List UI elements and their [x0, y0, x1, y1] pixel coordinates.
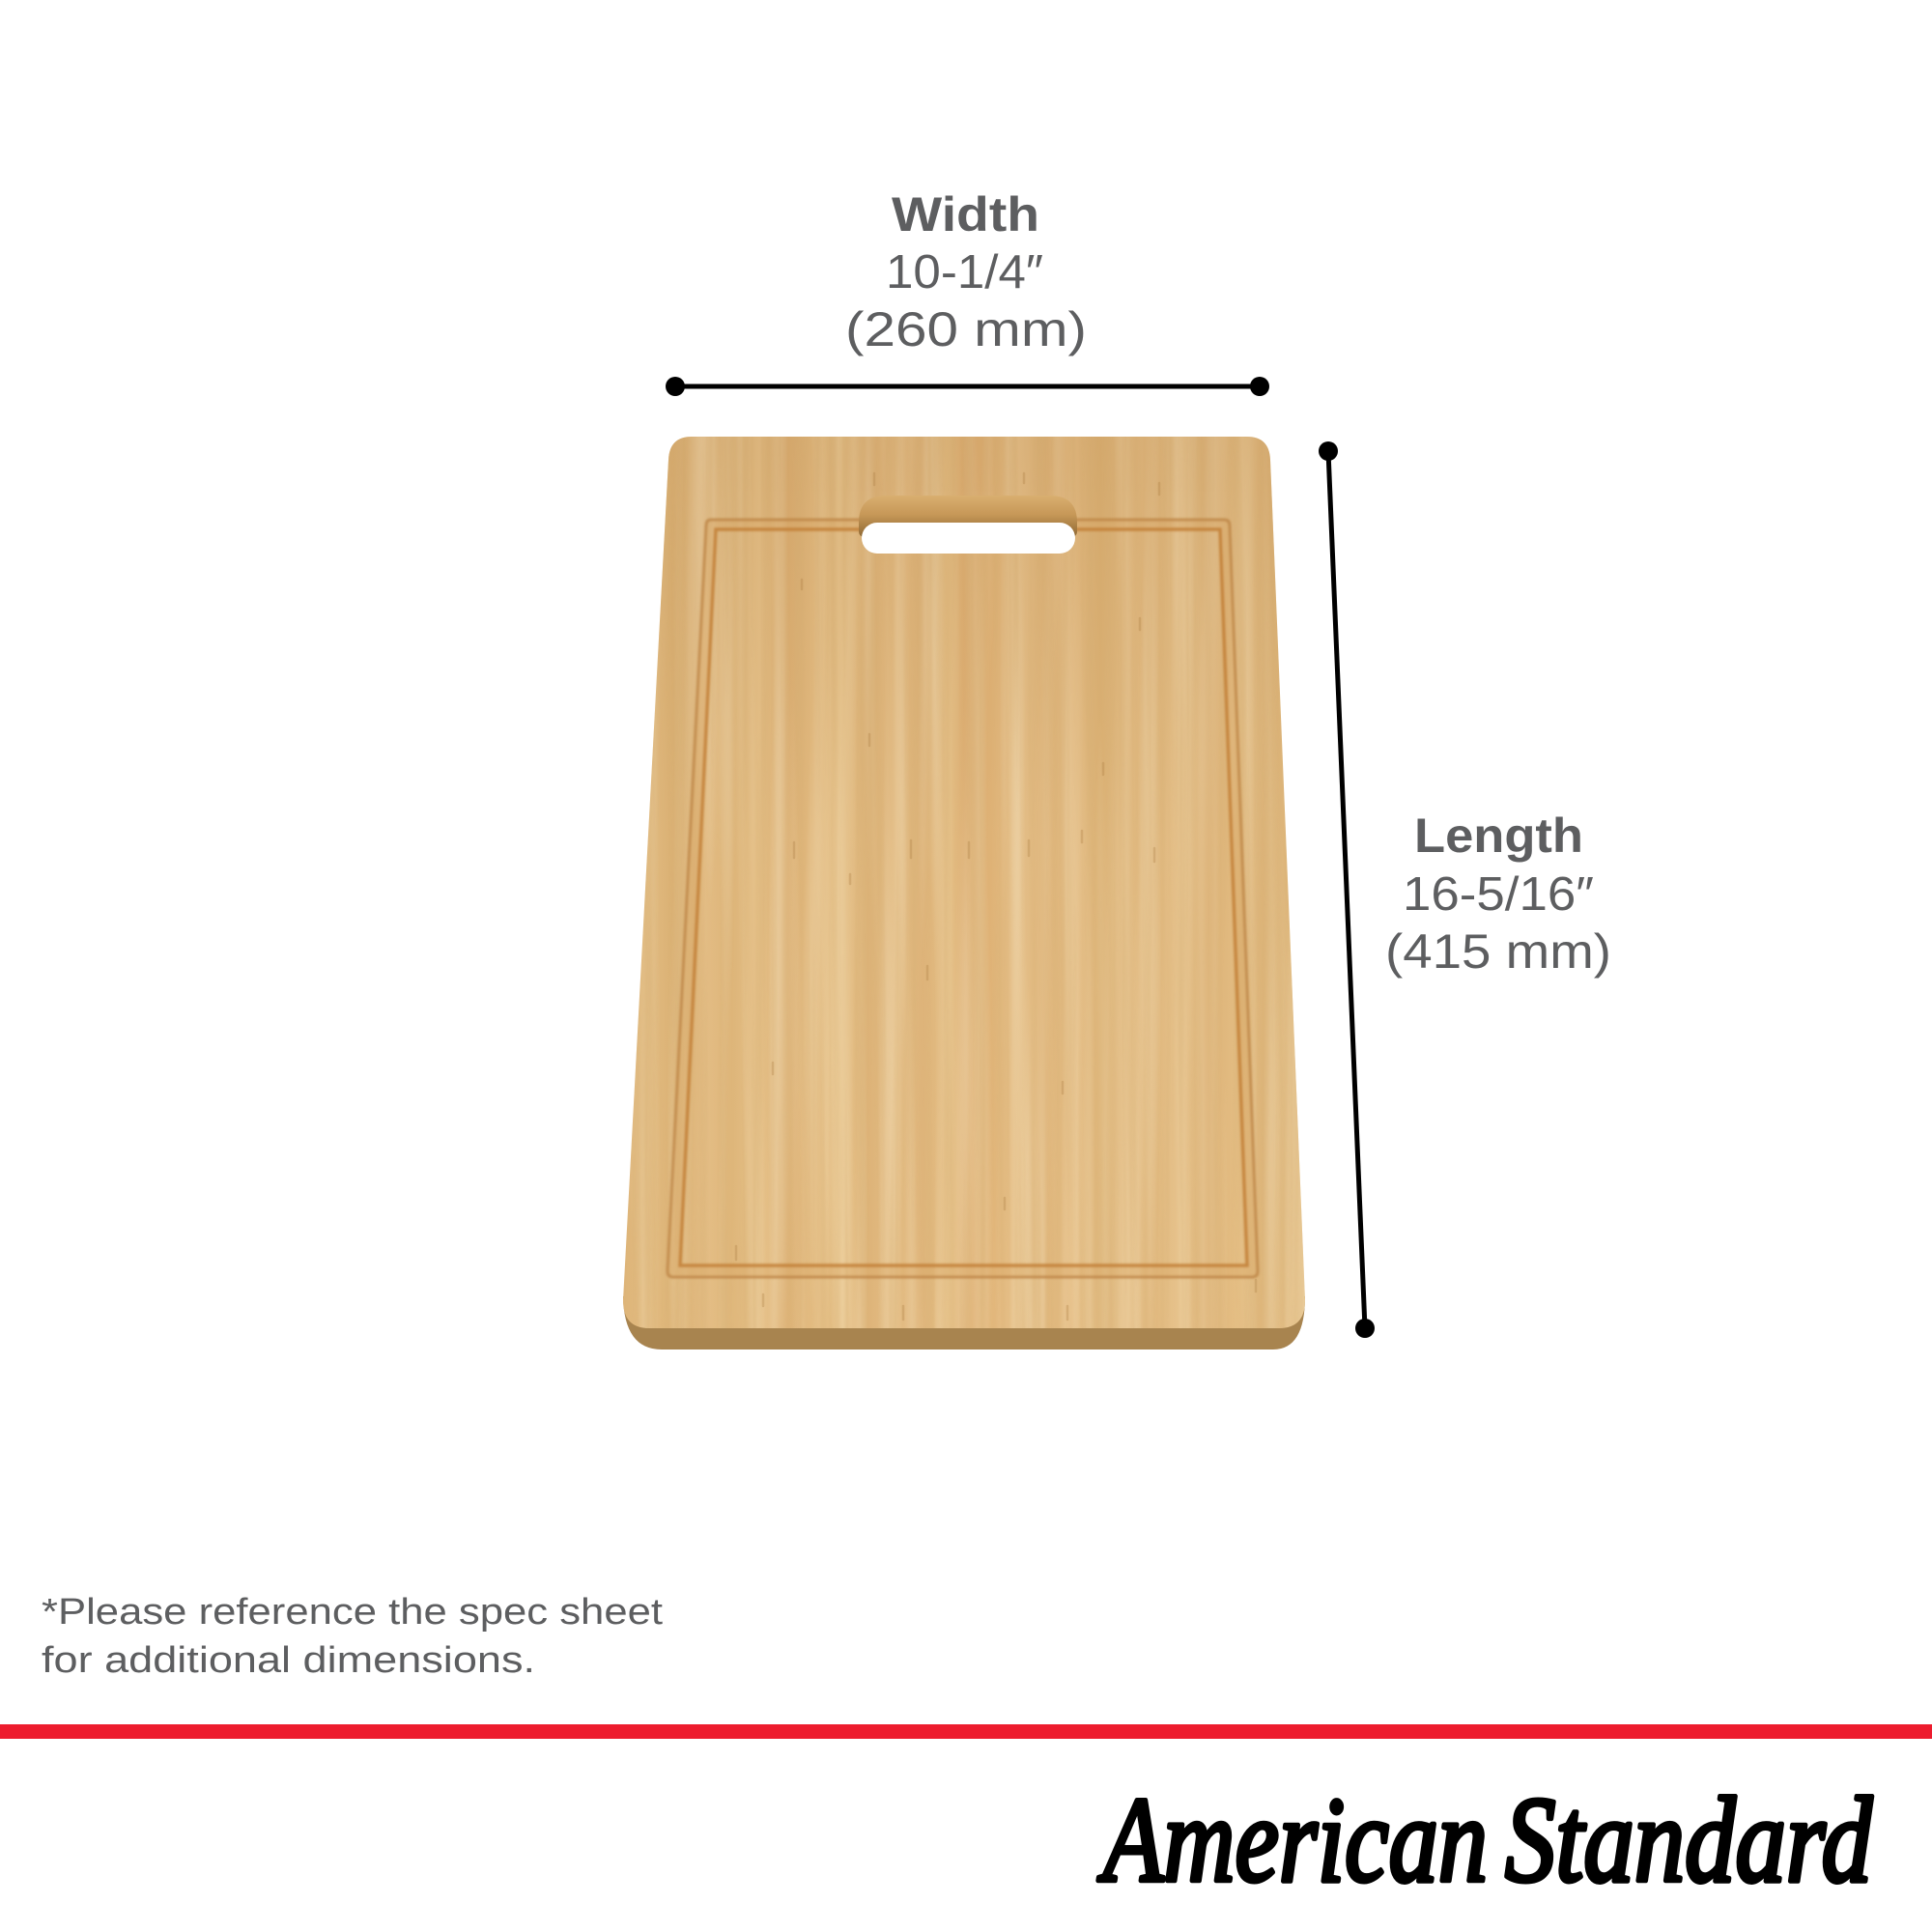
- footnote: for additional dimensions.: [42, 1640, 535, 1681]
- red divider bar: [0, 1724, 1932, 1739]
- board top surface: [618, 433, 1310, 1336]
- footnote: [42, 1592, 664, 1681]
- board side edge: [623, 1296, 1305, 1350]
- length dimension line: [1319, 441, 1375, 1338]
- footnote: *Please reference the spec sheet: [42, 1592, 664, 1633]
- brand logo: American: [1097, 1774, 1488, 1908]
- handle cut-out: [859, 496, 1077, 554]
- length heading: Length: [1414, 809, 1583, 863]
- length in millimetres: (415 mm): [1385, 924, 1611, 979]
- brand logo: [1097, 1774, 1873, 1908]
- juice groove: [668, 520, 1258, 1277]
- cutting board illustration: [618, 433, 1310, 1350]
- width in inches: 10-1/4″: [886, 246, 1043, 298]
- length label: [1385, 809, 1611, 979]
- width label: [845, 187, 1087, 356]
- width dimension line: [666, 377, 1269, 396]
- length in inches: 16-5/16″: [1403, 868, 1594, 921]
- width heading: Width: [892, 187, 1039, 242]
- width in millimetres: (260 mm): [845, 302, 1087, 356]
